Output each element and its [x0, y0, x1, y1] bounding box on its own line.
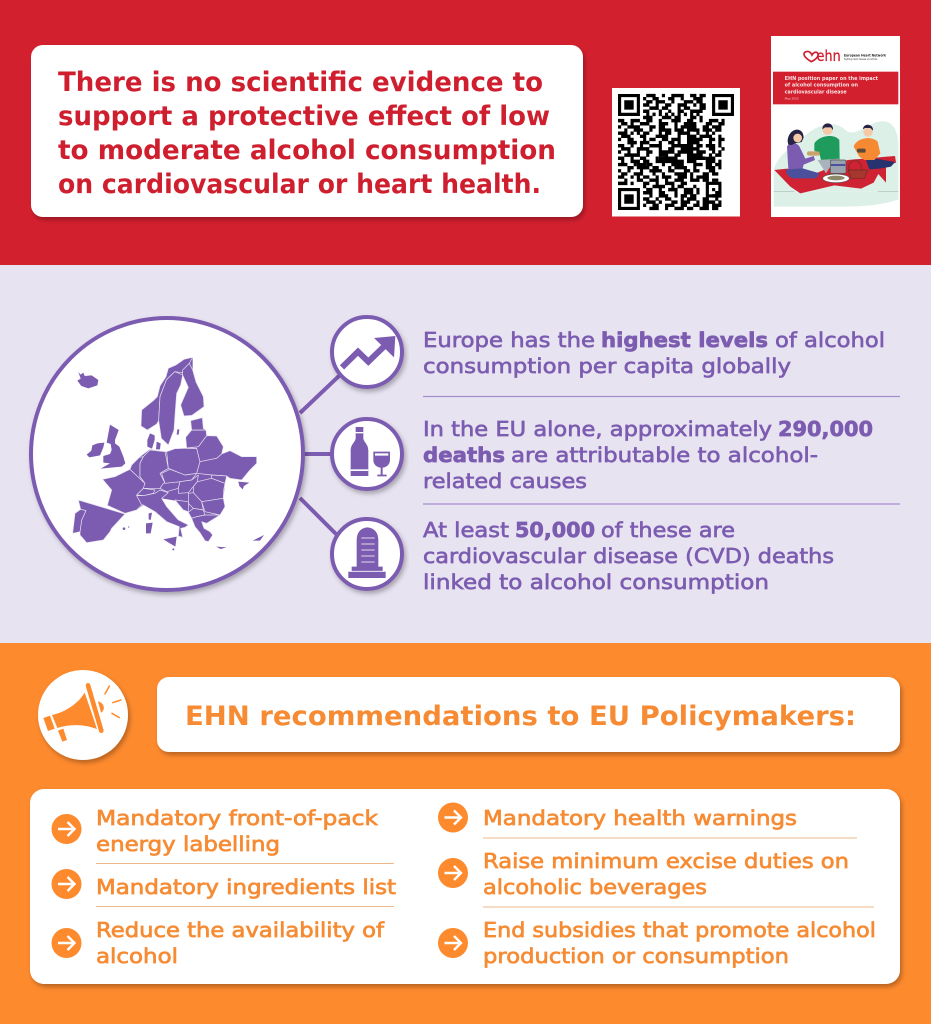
left recommendations: Mandatory ingredients list [96, 875, 396, 899]
headline: on cardiovascular or heart health. [58, 169, 541, 200]
stat: 290,000 deaths: are attributable to alcohol- [511, 443, 818, 467]
stat: 290,000 deaths: In the EU alone, approximately [423, 417, 772, 441]
map of Europe [73, 357, 264, 550]
left recommendations: energy labelling [96, 832, 280, 856]
cover red band: cardiovascular disease [785, 89, 847, 95]
stat: 290,000 deaths [423, 417, 873, 493]
heading card: EHN recommendations to EU Policymakers: [185, 701, 856, 732]
cover red band: of alcohol consumption on [785, 83, 858, 89]
recommendations card [30, 789, 900, 984]
cover red band [773, 72, 898, 104]
stat: highest levels: of alcohol [775, 328, 885, 352]
heading card [157, 677, 900, 752]
panel: recommendations [0, 643, 931, 1024]
cover logo [804, 48, 887, 65]
stat: 290,000 deaths: related causes [423, 469, 587, 493]
icon: bottle and glass [332, 419, 402, 489]
stat: 50,000 CVD deaths: linked to alcohol consumption [423, 570, 769, 594]
right recommendations: production or consumption [483, 944, 789, 968]
stat: highest levels [423, 328, 885, 378]
cover logo: European Heart Network [844, 53, 887, 57]
cover red band: EHN position paper on the impact [785, 76, 878, 82]
stat: 50,000 CVD deaths: of these are [601, 518, 735, 542]
icon: rising trend [332, 317, 402, 387]
stat: highest levels: Europe has the [423, 328, 595, 352]
stat: 50,000 CVD deaths: cardiovascular disease (CVD) deaths [423, 544, 834, 568]
icon: megaphone [38, 670, 128, 760]
icon: gravestone [332, 519, 402, 589]
right recommendations: End subsidies that promote alcohol [483, 918, 876, 942]
left recommendations: Reduce the availability of [96, 918, 385, 942]
cover red band: May 2025 [785, 97, 799, 101]
cover logo: Fighting heart disease and stroke [844, 57, 878, 61]
stat: 290,000 deaths: 290,000 [778, 417, 873, 441]
panel: Europe statistics [0, 265, 931, 643]
cover illustration [774, 121, 898, 207]
headline: support a protective effect of low [58, 101, 550, 132]
connector lines [300, 375, 340, 536]
arrow bullets [52, 802, 468, 958]
stat: 290,000 deaths: deaths [423, 443, 505, 467]
headline: to moderate alcohol consumption [58, 135, 556, 166]
cover logo: ehn [817, 48, 841, 65]
stat: 50,000 CVD deaths: 50,000 [515, 518, 595, 542]
left recommendations: Mandatory front-of-pack [96, 806, 378, 830]
right recommendations: Mandatory health warnings [483, 806, 797, 830]
left recommendations [96, 806, 396, 968]
panel: red header [0, 0, 931, 265]
stat: highest levels: consumption per capita globally [423, 354, 791, 378]
headline card [31, 45, 583, 217]
headline [58, 67, 556, 200]
stat: highest levels: highest levels [601, 328, 768, 352]
headline: There is no scientific evidence to [58, 67, 543, 98]
right recommendations: Raise minimum excise duties on [483, 849, 849, 873]
map circle [31, 318, 303, 590]
report cover [771, 36, 900, 217]
right recommendations: alcoholic beverages [483, 875, 707, 899]
stat: 50,000 CVD deaths [423, 518, 834, 594]
left recommendations: alcohol [96, 944, 178, 968]
right recommendations [483, 806, 876, 968]
stat: 50,000 CVD deaths: At least [423, 518, 509, 542]
QR code [612, 88, 740, 216]
